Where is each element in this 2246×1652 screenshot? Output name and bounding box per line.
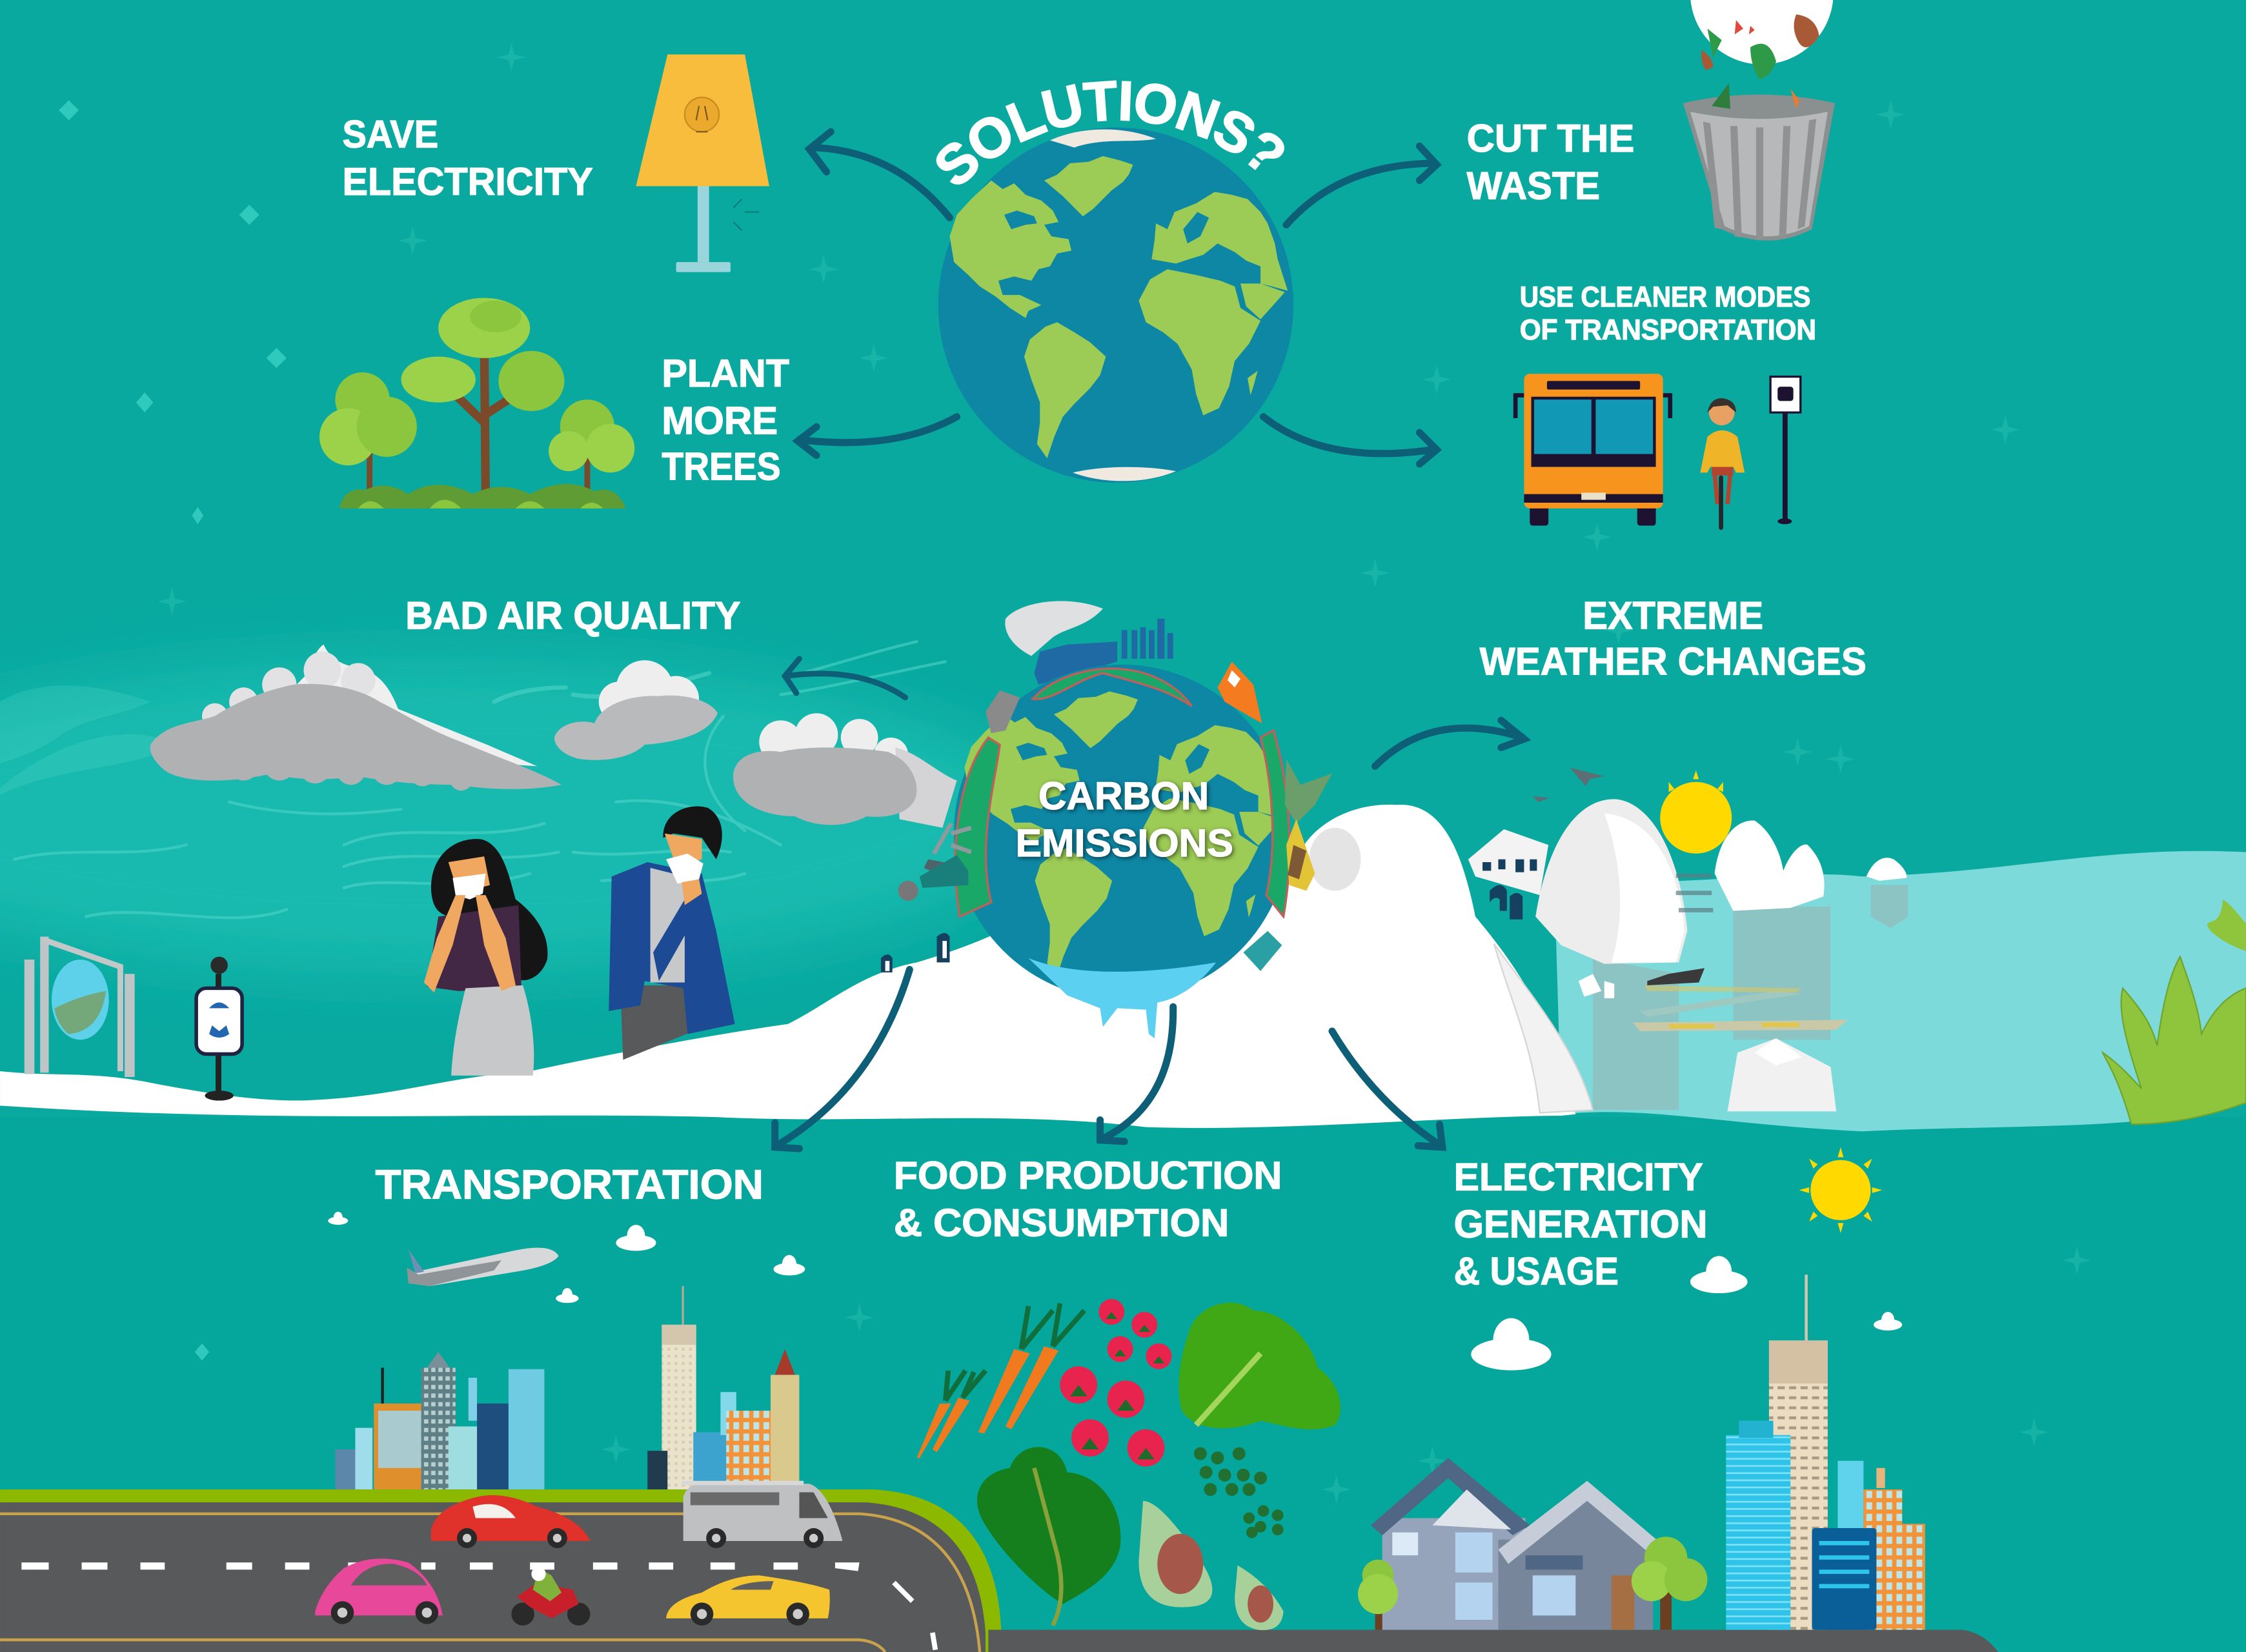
vehicle: red car (430, 1495, 590, 1548)
sun over the sea (1660, 771, 1732, 854)
label: use cleaner modes: OF TRANSPORTATION (1520, 314, 1816, 346)
label: save electricity: SAVE (342, 113, 438, 156)
heading: extreme weather changes: EXTREME (1583, 594, 1763, 637)
arrow: to transportation (775, 969, 909, 1149)
food: carrots (916, 1304, 1084, 1458)
label: plant more trees: TREES (662, 445, 781, 488)
signboard: glass frame (25, 936, 135, 1077)
cloud: mid smog (554, 660, 718, 760)
arrow: to waste (1286, 146, 1437, 225)
label: cut the waste: CUT THE (1467, 117, 1634, 160)
label: plant more trees: MORE (662, 399, 778, 442)
factory skyline (1005, 601, 1173, 685)
icon: sun (1799, 1147, 1882, 1233)
icon: lamp (636, 54, 769, 272)
icon: trees (319, 298, 634, 509)
icebergs (1310, 768, 1907, 1113)
towers (1726, 1274, 1925, 1630)
plant (2103, 900, 2246, 1124)
vehicle: van (682, 1481, 842, 1548)
heading: food production: & CONSUMPTION (894, 1201, 1229, 1244)
title: solutions: SOLUTIONS? (936, 80, 1284, 185)
heading: extreme weather changes (1480, 594, 1867, 683)
orange ship (1217, 661, 1262, 723)
label: cut the waste: WASTE (1467, 164, 1600, 207)
arrow: to electricity (1332, 1031, 1442, 1147)
heading: transportation: TRANSPORTATION (376, 1162, 764, 1208)
carbon globe (898, 601, 1332, 1038)
icon: cyclist (1700, 398, 1745, 530)
icon: bus (1515, 374, 1670, 525)
houses (1371, 1458, 1661, 1630)
water reflections (1593, 885, 1908, 1110)
heading: food production: FOOD PRODUCTION (894, 1154, 1282, 1197)
ice cap melting (1029, 958, 1216, 1038)
label: save electricity: ELECTRICITY (342, 160, 593, 203)
label: save electricity (342, 113, 593, 203)
food: peas (1194, 1447, 1284, 1538)
icon: trash can with food waste (1683, 0, 1835, 241)
road (0, 1489, 1998, 1652)
arrow: to electricity saving (809, 132, 949, 217)
melting sea (1554, 851, 2246, 1131)
yellow mine (1286, 819, 1315, 891)
snow ground (0, 805, 1575, 1128)
man with mask (609, 806, 735, 1060)
penguins (881, 933, 949, 972)
arrow: to air quality (785, 659, 905, 698)
city: left cluster (335, 1352, 544, 1489)
cloud: large smog (150, 645, 562, 791)
land rim (955, 669, 1290, 916)
heading: bad air quality: BAD AIR QUALITY (405, 594, 740, 637)
label: use cleaner modes (1520, 281, 1816, 346)
signpost (196, 957, 242, 1101)
label: carbon emissions: EMISSIONS (1016, 821, 1233, 865)
cloud: smog from globe (733, 713, 957, 828)
food: tomatoes (1060, 1299, 1171, 1467)
vehicle: pink car (315, 1558, 443, 1624)
smoky air wisps (0, 641, 946, 918)
clouds (328, 1212, 1902, 1370)
food: lettuce (1179, 1303, 1341, 1429)
satellite panel (1243, 931, 1282, 971)
label: carbon emissions (1016, 774, 1233, 865)
vehicle: yellow car (666, 1575, 830, 1626)
arrow: to weather (1375, 720, 1524, 766)
vehicle: motorbike (511, 1567, 590, 1626)
arrow: to trees (798, 417, 957, 456)
food: spinach (977, 1447, 1120, 1626)
icon: airplane (407, 1248, 559, 1286)
label: cut the waste (1467, 117, 1634, 207)
icon: bus stop sign (1770, 377, 1801, 524)
heading: electricity generation: GENERATION (1454, 1203, 1707, 1246)
label: use cleaner modes: USE CLEANER MODES (1520, 281, 1810, 313)
solutions globe (938, 128, 1293, 483)
rock (986, 690, 1020, 733)
arrow: to transport modes (1263, 417, 1437, 464)
heading: electricity generation (1454, 1155, 1707, 1293)
arrow: to food (1100, 1007, 1173, 1142)
label: plant more trees (662, 352, 789, 488)
heading: food production (894, 1154, 1282, 1244)
heading: electricity generation: & USAGE (1454, 1250, 1619, 1293)
heading: electricity generation: ELECTRICITY (1454, 1155, 1703, 1198)
label: carbon emissions: CARBON (1038, 774, 1209, 818)
hammer and tools (934, 823, 971, 854)
food: avocados (1138, 1501, 1284, 1630)
heading: extreme weather changes: WEATHER CHANGES (1480, 640, 1867, 683)
label: plant more trees: PLANT (662, 352, 789, 395)
woman with mask (424, 839, 547, 1076)
trees by houses (1358, 1536, 1707, 1630)
forest (1285, 759, 1332, 823)
city: right cluster (647, 1286, 799, 1489)
